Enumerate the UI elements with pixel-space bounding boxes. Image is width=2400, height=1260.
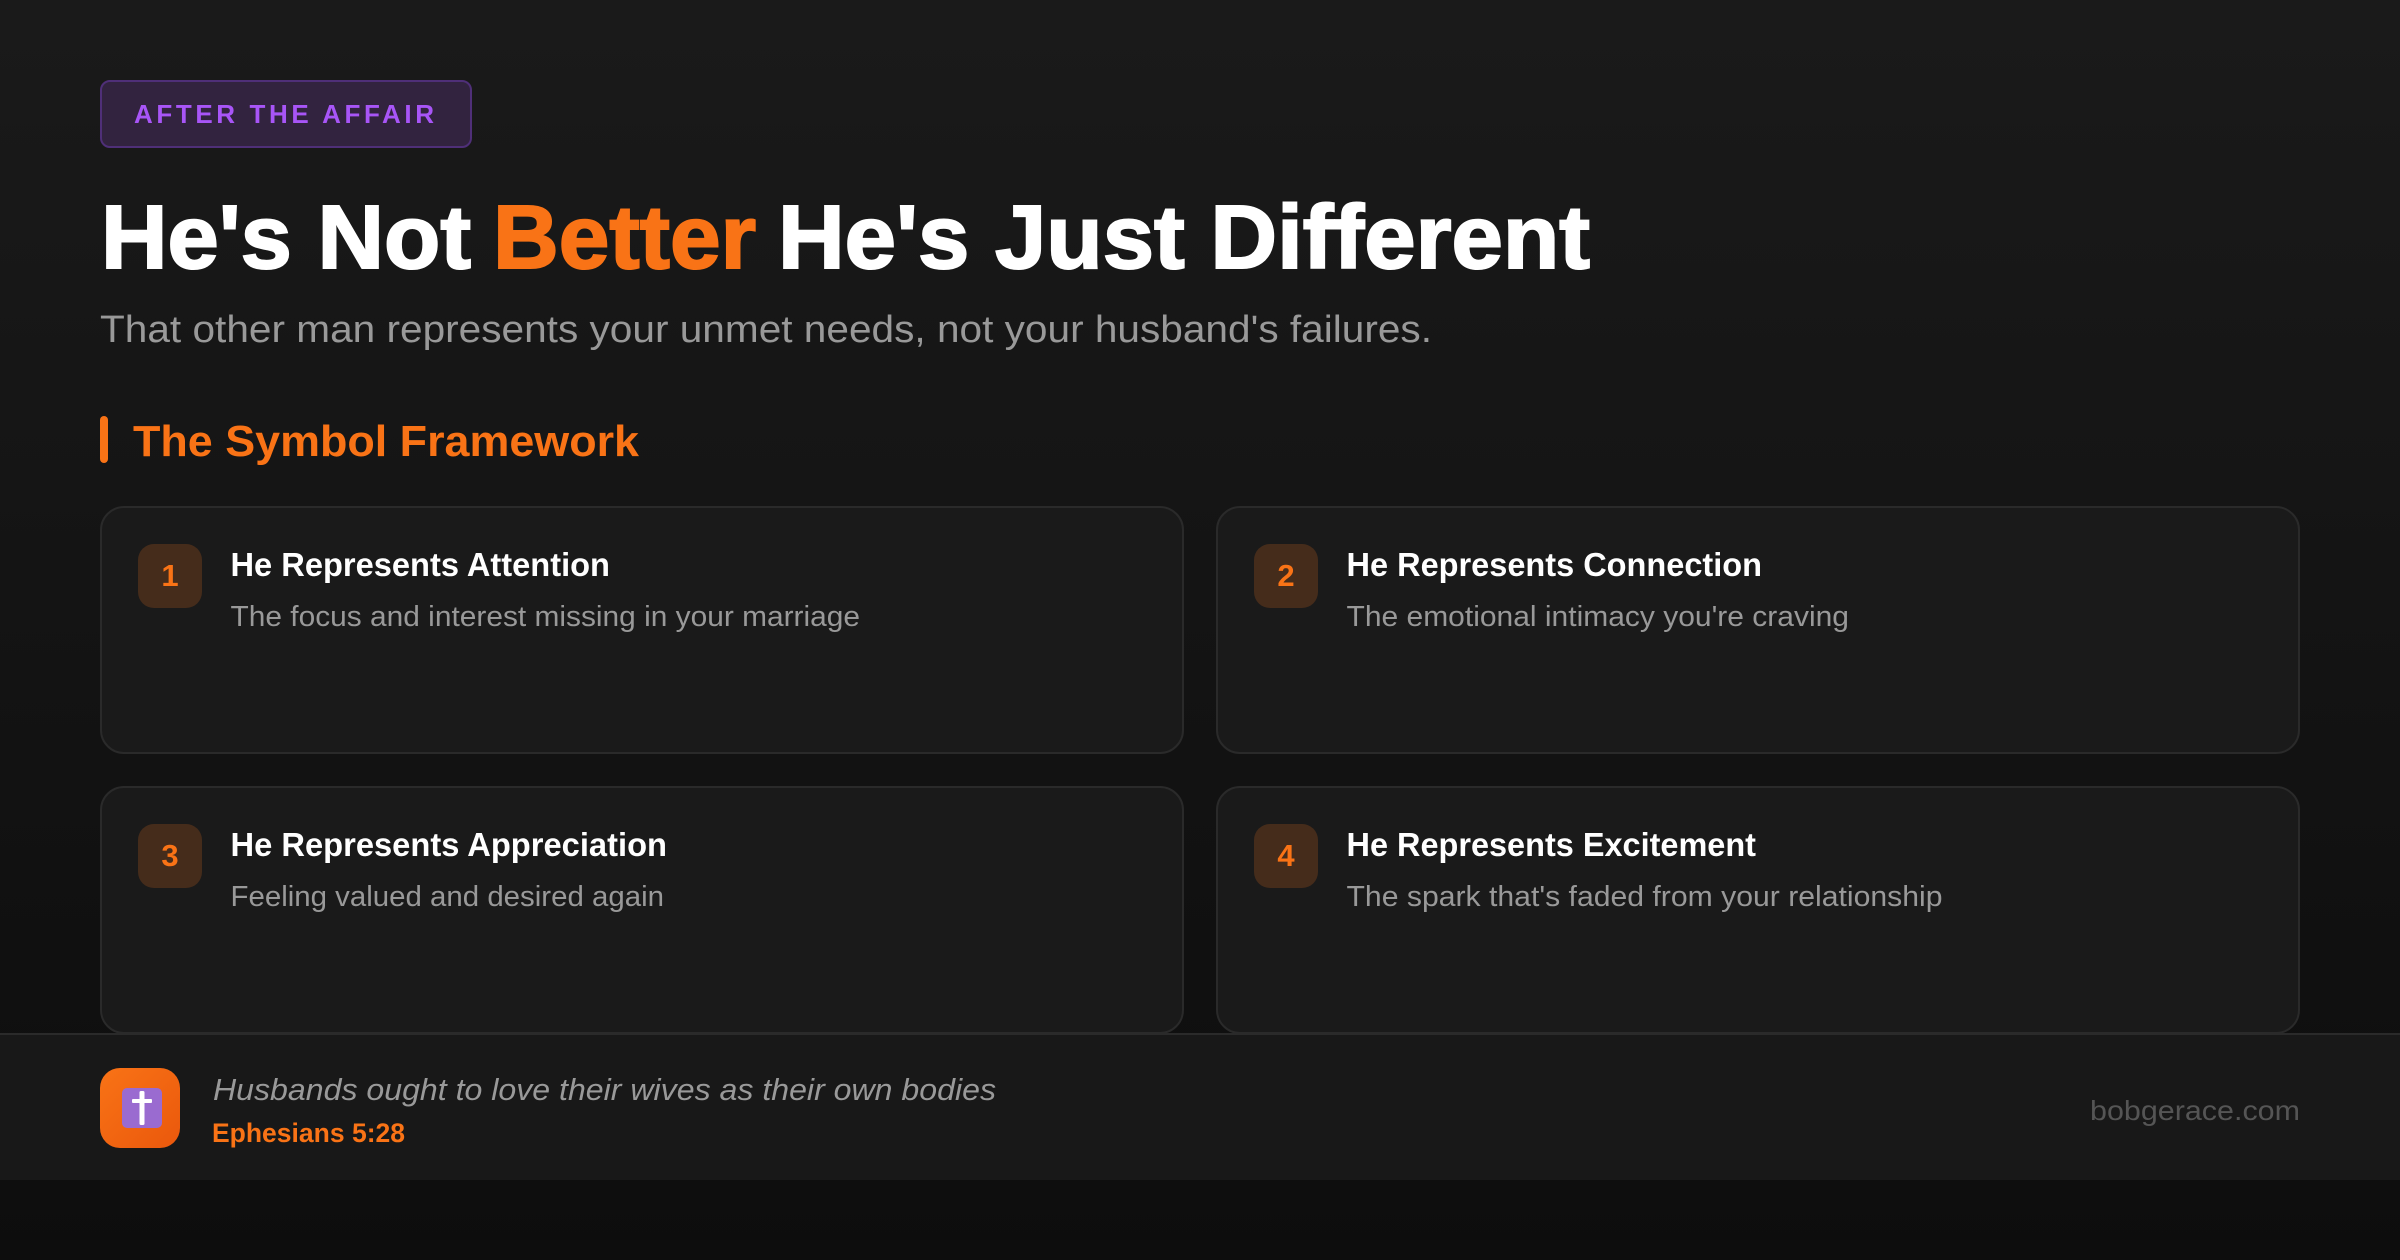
title: He's Just Different <box>778 188 1590 288</box>
card 4: excitement: He Represents Excitement <box>1346 826 1756 863</box>
title: Better <box>493 188 756 288</box>
section heading: the symbol framework: The Symbol Framework <box>133 417 640 466</box>
badge: after the affair: AFTER THE AFFAIR <box>134 99 434 129</box>
title <box>101 188 1590 288</box>
card 4: excitement <box>1217 787 2299 1033</box>
card 1: attention <box>101 507 1183 753</box>
card 2: connection: The emotional intimacy you're craving <box>1346 601 1849 633</box>
card 3: appreciation: He Represents Appreciation <box>230 826 667 863</box>
scripture reference: Ephesians 5:28 <box>212 1118 405 1148</box>
title: He's Not <box>101 188 471 288</box>
card 3: appreciation: 3 <box>161 838 179 873</box>
card 3: appreciation: Feeling valued and desired again <box>230 881 664 913</box>
subtitle: That other man represents your unmet needs, not your husband's failures. <box>100 309 1432 351</box>
footer <box>0 1033 2400 1180</box>
scripture quote: Husbands ought to love their wives as their own bodies <box>213 1072 996 1107</box>
icon: cross <box>100 1068 180 1148</box>
card 1: attention: The focus and interest missing in your marriage <box>230 601 860 633</box>
card 2: connection: He Represents Connection <box>1346 546 1762 583</box>
card 3: appreciation <box>101 787 1183 1033</box>
card 2: connection: 2 <box>1277 558 1295 593</box>
card 1: attention: 1 <box>161 558 179 593</box>
website: bobgerace.com <box>2090 1095 2300 1126</box>
card 4: excitement: The spark that's faded from your relationship <box>1346 881 1942 913</box>
card 2: connection <box>1217 507 2299 753</box>
card 1: attention: He Represents Attention <box>230 546 610 583</box>
card 4: excitement: 4 <box>1277 838 1295 873</box>
badge: after the affair <box>101 81 471 147</box>
